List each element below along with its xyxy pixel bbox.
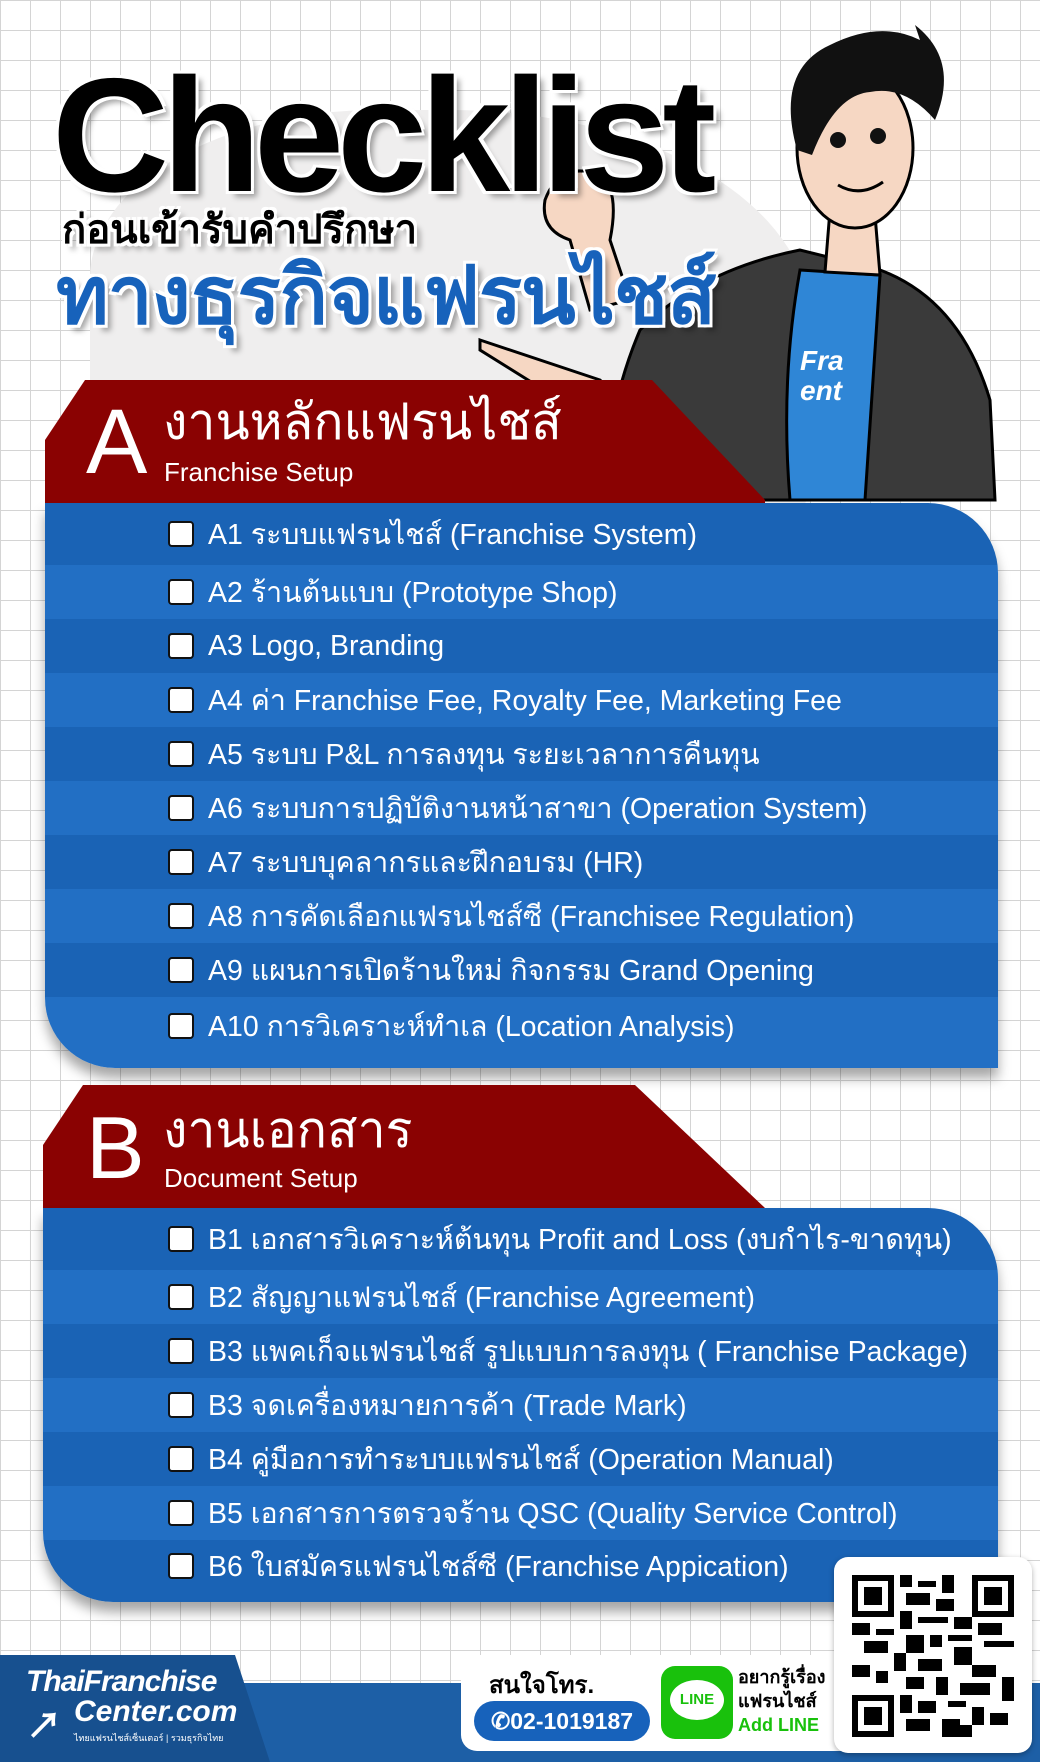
heading A: Franchise Setup (164, 457, 353, 487)
character illustration: ent (800, 375, 844, 406)
footer logo (0, 1655, 270, 1762)
subtitle line 1: ก่อนเข้ารับคำปรึกษา (62, 208, 417, 252)
LINE text: แฟรนไชส์ (738, 1691, 817, 1711)
banner A (45, 380, 765, 515)
character illustration: Fra (800, 345, 844, 376)
panel B checklist: B3 แพคเก็จแฟรนไชส์ รูปแบบการลงทุน ( Franchise Package) (208, 1336, 968, 1368)
neck and face (825, 210, 880, 275)
heading B: B (86, 1098, 145, 1197)
banner B (43, 1085, 765, 1220)
panel B checklist: B3 จดเครื่องหมายการค้า (Trade Mark) (208, 1390, 687, 1422)
footer logo: Center.com (74, 1695, 237, 1728)
heading A: งานหลักแฟรนไชส์ (163, 394, 562, 450)
QR code (834, 1557, 1032, 1753)
panel A checklist: A5 ระบบ P&L การลงทุน ระยะเวลาการคืนทุน (208, 739, 760, 771)
panel A checklist: A9 แผนการเปิดร้านใหม่ กิจกรรม Grand Opening (208, 955, 814, 987)
panel A checklist: A6 ระบบการปฏิบัติงานหน้าสาขา (Operation System) (208, 793, 868, 825)
heading B: งานเอกสาร (163, 1102, 413, 1158)
panel B checklist: B5 เอกสารการตรวจร้าน QSC (Quality Service Control) (208, 1498, 898, 1530)
contact card (461, 1655, 861, 1751)
panel A checklist: A7 ระบบบุคลากรและฝึกอบรม (HR) (208, 847, 643, 879)
panel A checklist: A8 การคัดเลือกแฟรนไชส์ซี (Franchisee Regulation) (208, 901, 854, 933)
panel A checklist: A10 การวิเคราะห์ทำเล (Location Analysis) (208, 1010, 735, 1042)
hair (791, 25, 944, 155)
shirt (787, 270, 880, 500)
panel B checklist: B6 ใบสมัครแฟรนไชส์ซี (Franchise Appication) (208, 1551, 789, 1583)
panel A checklist: A2 ร้านต้นแบบ (Prototype Shop) (208, 577, 617, 609)
heading B: Document Setup (164, 1163, 358, 1193)
panel A checklist: A1 ระบบแฟรนไชส์ (Franchise System) (208, 519, 697, 551)
contact card: ✆02-1019187 (491, 1708, 633, 1734)
panel B checklist: B4 คู่มือการทำระบบแฟรนไชส์ (Operation Manual) (208, 1444, 834, 1476)
footer logo: ↗ (26, 1705, 62, 1746)
title: Checklist: Checklist (52, 45, 709, 226)
subtitle line 2: ทางธุรกิจแฟรนไชส์ (56, 251, 715, 340)
character illustration (478, 25, 997, 502)
LINE text: Add LINE (738, 1715, 819, 1735)
panel B checklist: B2 สัญญาแฟรนไชส์ (Franchise Agreement) (208, 1282, 755, 1314)
LINE icon: LINE (680, 1691, 714, 1708)
LINE text: อยากรู้เรื่อง (738, 1667, 825, 1687)
footer logo: ThaiFranchise (26, 1665, 216, 1698)
panel A checklist: A3 Logo, Branding (208, 630, 444, 662)
jacket (600, 250, 995, 500)
LINE text (738, 1664, 825, 1735)
hand up (544, 171, 630, 310)
footer logo: ไทยแฟรนไชส์เซ็นเตอร์ | รวมธุรกิจไทย (74, 1733, 223, 1743)
footer band (0, 1683, 1040, 1762)
heading A (86, 391, 562, 493)
phone: สนใจโทร. (489, 1672, 594, 1699)
panel A checklist (45, 503, 998, 1068)
heading A: A (86, 391, 147, 493)
pointing hand (480, 340, 640, 430)
heading B (86, 1098, 413, 1197)
LINE icon (661, 1666, 733, 1739)
panel A checklist: A4 ค่า Franchise Fee, Royalty Fee, Marketing Fee (208, 685, 842, 717)
background blob (90, 110, 810, 530)
panel B checklist: B1 เอกสารวิเคราะห์ต้นทุน Profit and Loss (งบกำไร-ขาดทุน) (208, 1224, 952, 1256)
panel B checklist (43, 1208, 998, 1602)
